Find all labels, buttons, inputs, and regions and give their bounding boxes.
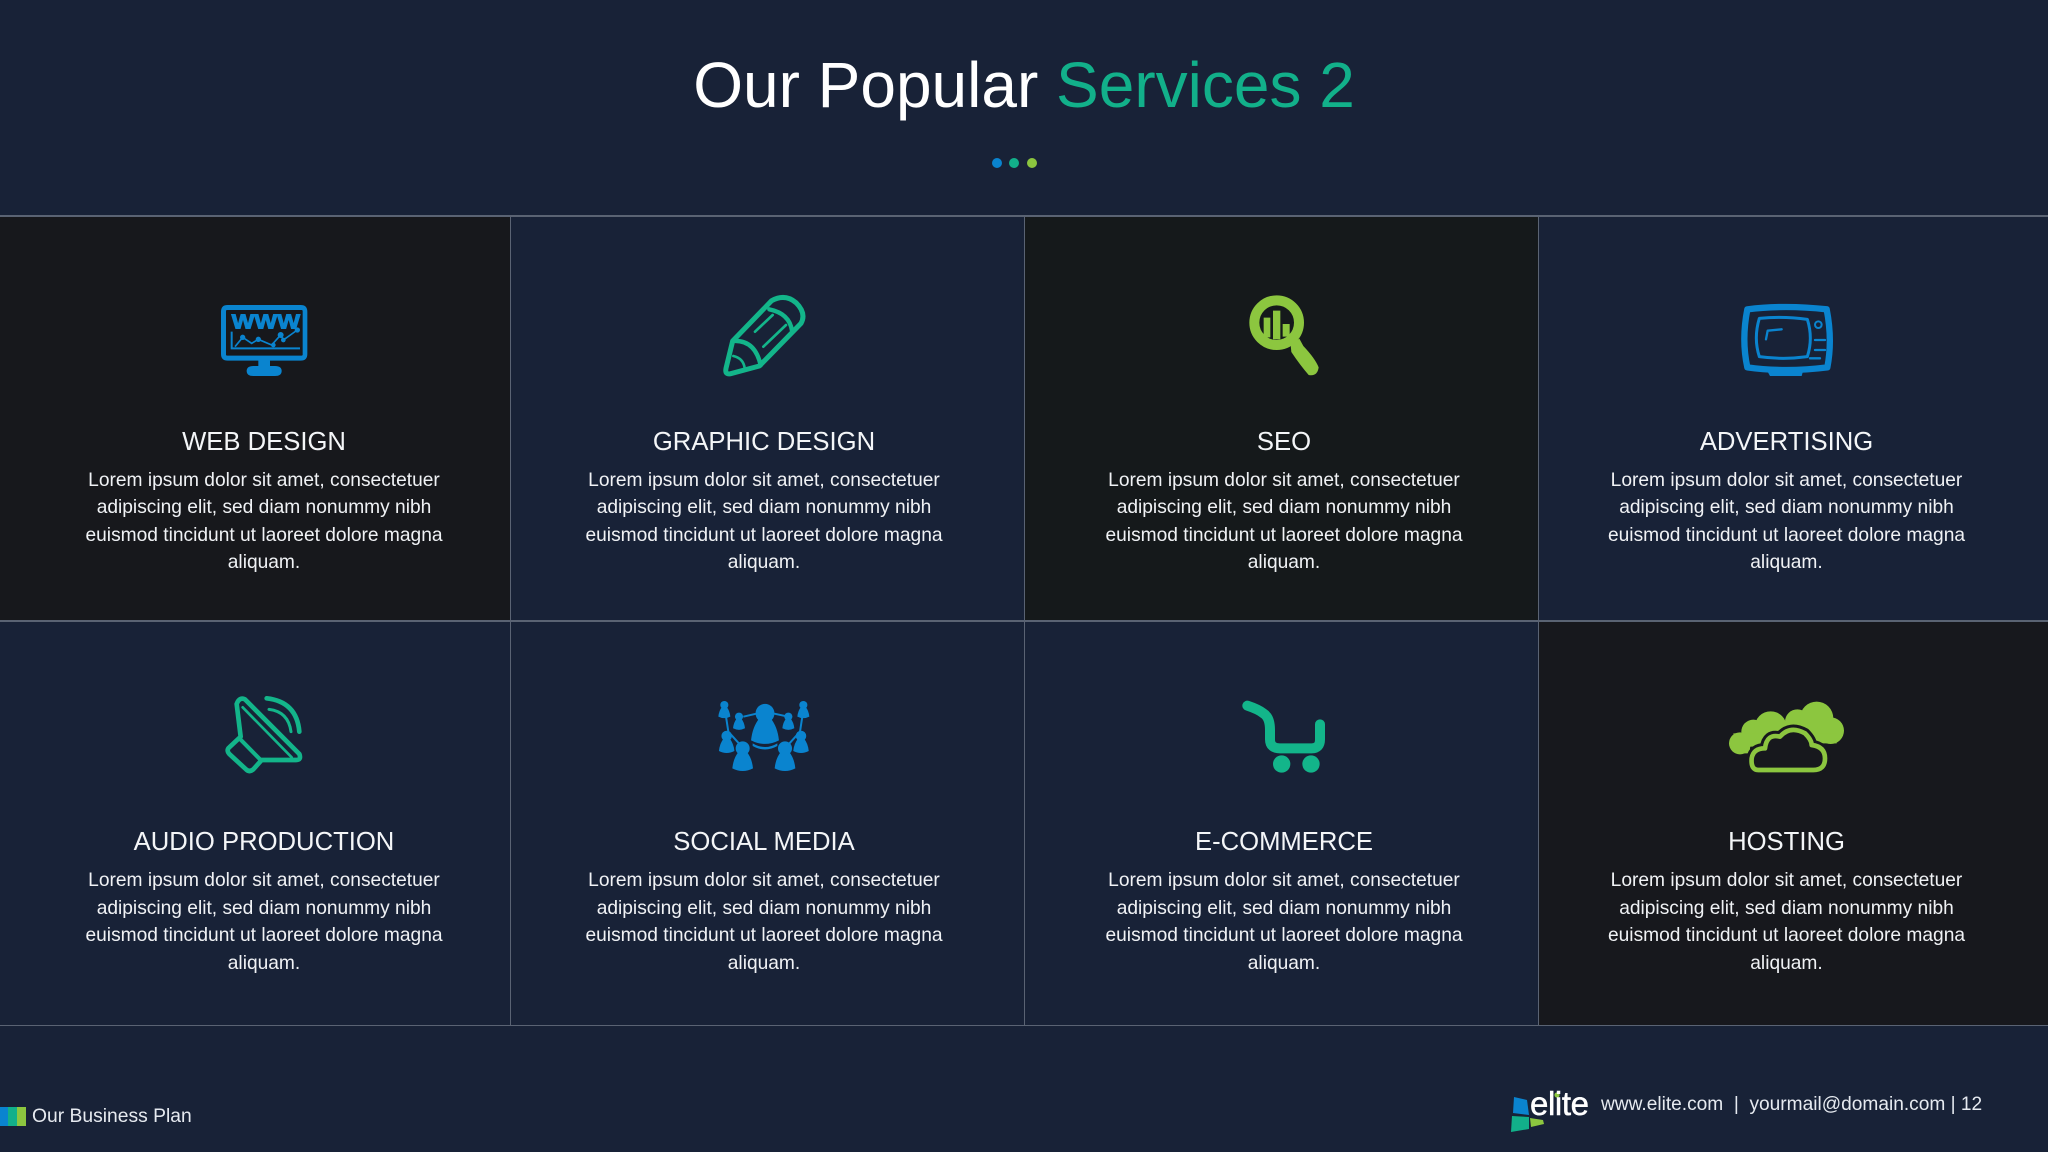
panel: graphic design bbox=[585, 294, 943, 573]
heading: AUDIO PRODUCTION bbox=[134, 828, 394, 856]
description: Lorem ipsum dolor sit amet, consectetuer bbox=[1611, 470, 1962, 491]
icon: television bbox=[1741, 304, 1833, 376]
heading: E-COMMERCE bbox=[1195, 828, 1373, 856]
footer: logo bbox=[1511, 1085, 1589, 1132]
description: euismod tincidunt ut laoreet dolore magna bbox=[1608, 525, 1965, 546]
icon: speaker bbox=[225, 696, 302, 774]
description: euismod tincidunt ut laoreet dolore magna bbox=[1105, 925, 1463, 946]
icon: magnifier bbox=[1249, 295, 1319, 376]
panel: social media bbox=[585, 701, 943, 974]
description: aliquam. bbox=[1750, 552, 1823, 573]
description: adipiscing elit, sed diam nonummy nibh bbox=[1117, 898, 1451, 919]
footer: contact details: www.elite.com | yourmail@domain.com | 12 bbox=[1601, 1094, 1982, 1115]
icon: people network bbox=[718, 701, 810, 771]
description: euismod tincidunt ut laoreet dolore magna bbox=[85, 925, 443, 946]
description: aliquam. bbox=[228, 953, 300, 974]
logo mark bbox=[1511, 1092, 1560, 1132]
description: aliquam. bbox=[728, 552, 800, 573]
footer: colour swatch bbox=[0, 1107, 26, 1126]
description bbox=[1105, 470, 1463, 573]
title dots bbox=[992, 158, 1037, 168]
icon: clouds bbox=[1729, 702, 1844, 772]
description: Lorem ipsum dolor sit amet, consectetuer bbox=[1611, 870, 1962, 891]
icon: www monitor bbox=[221, 305, 308, 376]
footer: document name: Our Business Plan bbox=[32, 1106, 192, 1127]
logo wordmark: elite bbox=[1530, 1085, 1589, 1122]
description bbox=[585, 470, 943, 573]
description: adipiscing elit, sed diam nonummy nibh bbox=[97, 898, 431, 919]
description: euismod tincidunt ut laoreet dolore magna bbox=[585, 925, 943, 946]
description: aliquam. bbox=[1750, 953, 1823, 974]
description: Lorem ipsum dolor sit amet, consectetuer bbox=[88, 870, 440, 891]
description bbox=[585, 870, 943, 974]
panel: hosting bbox=[1539, 621, 2048, 1026]
description: adipiscing elit, sed diam nonummy nibh bbox=[1619, 497, 1954, 518]
title: Our Popular Services 2 bbox=[693, 49, 1355, 121]
description: aliquam. bbox=[1248, 552, 1320, 573]
heading: WEB DESIGN bbox=[182, 428, 346, 456]
description: euismod tincidunt ut laoreet dolore magna bbox=[85, 525, 443, 546]
description bbox=[85, 470, 443, 573]
description: Lorem ipsum dolor sit amet, consectetuer bbox=[588, 470, 940, 491]
description: euismod tincidunt ut laoreet dolore magna bbox=[1105, 525, 1463, 546]
heading: SEO bbox=[1257, 428, 1311, 456]
description bbox=[1608, 470, 1966, 573]
description bbox=[1105, 870, 1463, 974]
description: aliquam. bbox=[728, 953, 800, 974]
description: Lorem ipsum dolor sit amet, consectetuer bbox=[588, 870, 940, 891]
description bbox=[1608, 870, 1966, 974]
description: Lorem ipsum dolor sit amet, consectetuer bbox=[1108, 470, 1460, 491]
icon: shopping cart bbox=[1242, 700, 1325, 773]
description: euismod tincidunt ut laoreet dolore magna bbox=[585, 525, 943, 546]
panel: web design bbox=[0, 216, 510, 621]
description: aliquam. bbox=[1248, 953, 1320, 974]
heading: GRAPHIC DESIGN bbox=[653, 428, 875, 456]
panel: advertising bbox=[1608, 304, 1966, 573]
description: adipiscing elit, sed diam nonummy nibh bbox=[1619, 898, 1954, 919]
heading: SOCIAL MEDIA bbox=[673, 828, 855, 856]
description: adipiscing elit, sed diam nonummy nibh bbox=[597, 898, 931, 919]
description: adipiscing elit, sed diam nonummy nibh bbox=[597, 497, 931, 518]
panel: seo bbox=[1025, 216, 1539, 621]
description: euismod tincidunt ut laoreet dolore magna bbox=[1608, 925, 1965, 946]
description: aliquam. bbox=[228, 552, 300, 573]
heading: ADVERTISING bbox=[1700, 428, 1873, 456]
panel: e-commerce bbox=[1105, 700, 1463, 974]
description bbox=[85, 870, 443, 974]
description: adipiscing elit, sed diam nonummy nibh bbox=[97, 497, 431, 518]
panel: audio production bbox=[85, 696, 443, 974]
icon: pencil bbox=[723, 294, 806, 376]
description: Lorem ipsum dolor sit amet, consectetuer bbox=[1108, 870, 1460, 891]
description: Lorem ipsum dolor sit amet, consectetuer bbox=[88, 470, 440, 491]
icon: www monitor: WWW bbox=[232, 310, 301, 333]
heading: HOSTING bbox=[1728, 828, 1845, 856]
description: adipiscing elit, sed diam nonummy nibh bbox=[1117, 497, 1451, 518]
